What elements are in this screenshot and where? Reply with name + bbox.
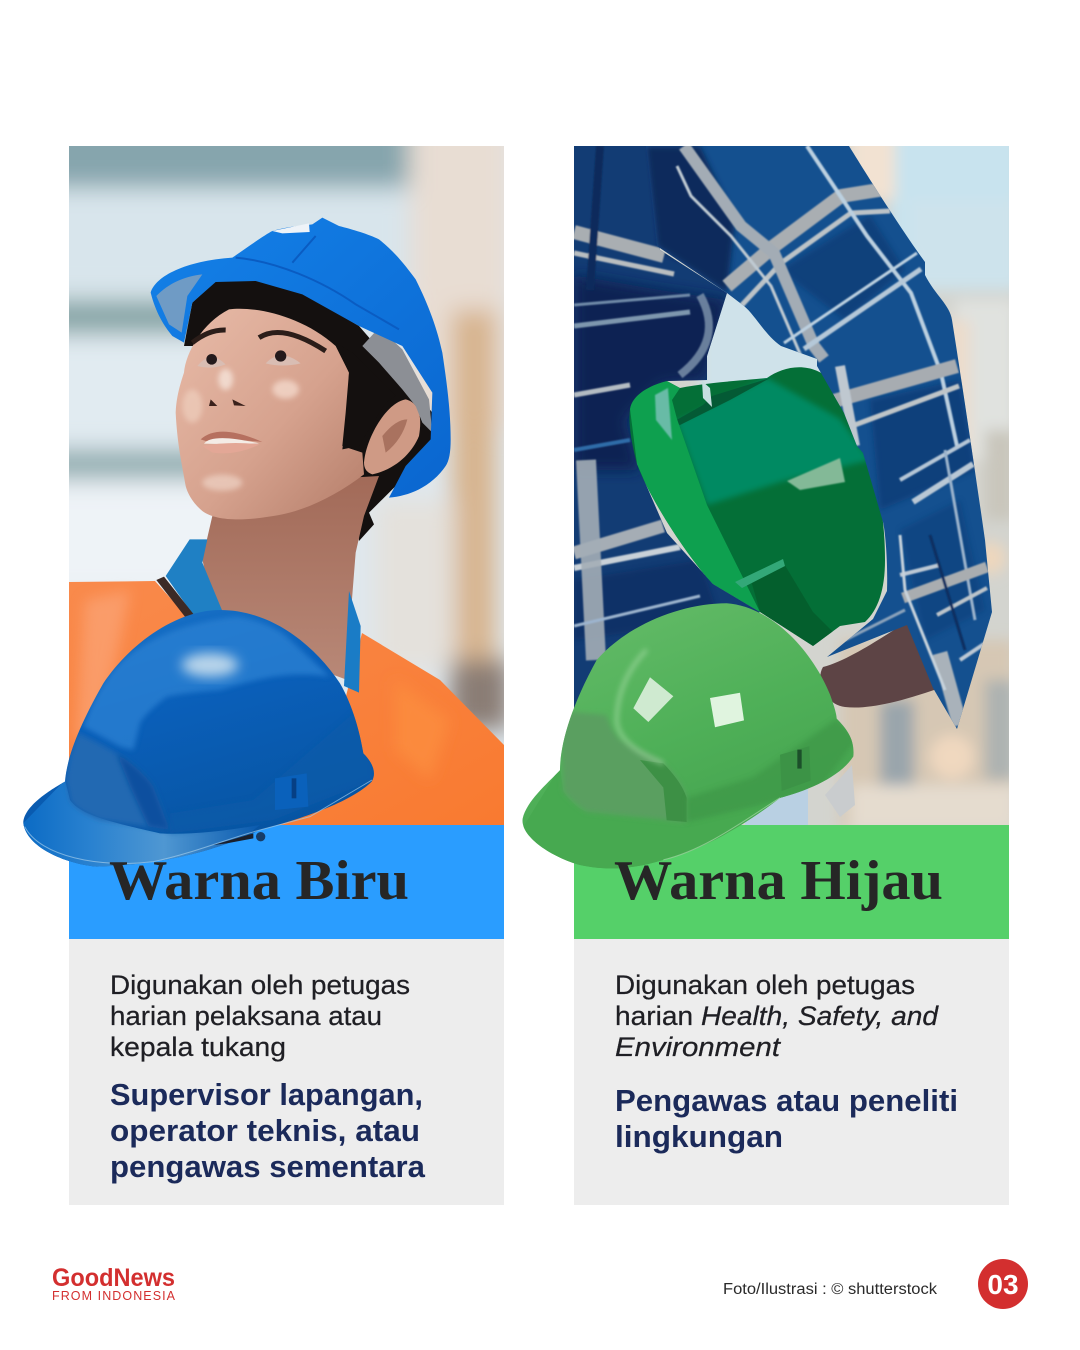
role text blue: pengawas sementara xyxy=(110,1149,426,1184)
mouth xyxy=(201,432,262,442)
stripes xyxy=(677,146,990,725)
hand xyxy=(820,622,937,708)
photo credit: Foto/Ilustrasi : © shutterstock xyxy=(723,1281,937,1298)
role text blue: Supervisor lapangan, xyxy=(110,1077,423,1112)
brim xyxy=(23,782,258,866)
stripes xyxy=(574,146,709,660)
eyebrows xyxy=(192,330,326,351)
photo: worker holding green hard hat xyxy=(574,126,1020,830)
rim xyxy=(630,381,760,620)
blurred background xyxy=(700,126,1020,830)
description text green: Digunakan oleh petugas xyxy=(615,970,915,1000)
description text green xyxy=(615,970,939,1062)
brim underside xyxy=(156,274,202,333)
description text green: harian Health, Safety, and xyxy=(615,1001,939,1031)
plaid sleeve xyxy=(640,146,1000,746)
curved highlight xyxy=(617,650,663,763)
icon: green hard hat xyxy=(520,603,857,874)
reflections xyxy=(633,677,673,722)
helmet interior shading xyxy=(630,378,870,646)
lower shell band xyxy=(687,719,857,822)
strap xyxy=(825,765,855,817)
lower rim band xyxy=(170,713,373,833)
face highlights xyxy=(182,369,299,491)
shirt body xyxy=(574,146,760,708)
cap highlight xyxy=(182,653,238,677)
top cap xyxy=(83,617,330,750)
icon: blue hard hat xyxy=(20,610,374,873)
held green hard hat xyxy=(629,367,885,646)
brim edge xyxy=(663,798,780,860)
role text blue xyxy=(110,1077,426,1184)
blue collar xyxy=(166,539,222,618)
role text green: Pengawas atau peneliti xyxy=(615,1083,958,1118)
eyes xyxy=(197,350,301,368)
heading: Warna Hijau: Warna Hijau xyxy=(614,850,943,912)
page number badge: 03 xyxy=(987,1269,1019,1300)
description text blue: kepala tukang xyxy=(110,1032,286,1062)
role text green: lingkungan xyxy=(615,1119,783,1154)
dark shadow xyxy=(574,275,727,470)
left shell xyxy=(65,733,152,828)
neck xyxy=(202,476,379,679)
description card green xyxy=(574,939,1009,1205)
page number badge xyxy=(978,1259,1028,1309)
description text blue: harian pelaksana atau xyxy=(110,1001,382,1031)
photo: worker in blue hard hat xyxy=(69,146,504,825)
footer logo: GoodNews from Indonesia: GoodNews xyxy=(52,1264,175,1292)
role text blue: operator teknis, atau xyxy=(110,1113,420,1148)
pin xyxy=(256,832,265,841)
tab xyxy=(702,381,712,407)
footer logo: GoodNews from Indonesia: FROM INDONESIA xyxy=(52,1289,176,1303)
hat top highlight xyxy=(272,223,310,233)
hard hat worn xyxy=(151,218,451,498)
panel: warna hijau xyxy=(520,126,1020,1205)
clip xyxy=(275,773,308,810)
title band blue xyxy=(69,825,504,939)
face xyxy=(176,309,364,519)
description text blue xyxy=(110,970,410,1062)
brim xyxy=(520,767,787,874)
jeans xyxy=(745,785,808,825)
shading patches xyxy=(646,146,735,293)
helmet shading xyxy=(520,712,857,874)
interior highlight xyxy=(787,458,845,490)
description text blue: Digunakan oleh petugas xyxy=(110,970,410,1000)
panel: warna biru xyxy=(20,110,510,1205)
teal interior band xyxy=(677,378,870,505)
hair xyxy=(184,279,432,541)
vest trim xyxy=(156,577,195,618)
safety vest xyxy=(69,581,504,825)
heading: Warna Biru: Warna Biru xyxy=(109,850,409,912)
left shell xyxy=(562,712,687,822)
role text green xyxy=(615,1083,958,1154)
person drawn at photo scale xyxy=(151,218,451,693)
hair sideburn xyxy=(342,368,349,450)
ear xyxy=(364,399,420,474)
nose xyxy=(209,399,246,406)
description text green: Environment xyxy=(615,1032,782,1062)
description card blue xyxy=(69,939,504,1205)
helmet shading xyxy=(20,617,373,873)
footer logo: GoodNews from Indonesia xyxy=(52,1264,176,1303)
dark notch xyxy=(750,562,837,646)
clip xyxy=(780,746,811,791)
blurred background xyxy=(69,146,504,744)
title band green xyxy=(574,825,1009,939)
headband strap xyxy=(362,328,432,433)
brim edge xyxy=(25,780,372,863)
